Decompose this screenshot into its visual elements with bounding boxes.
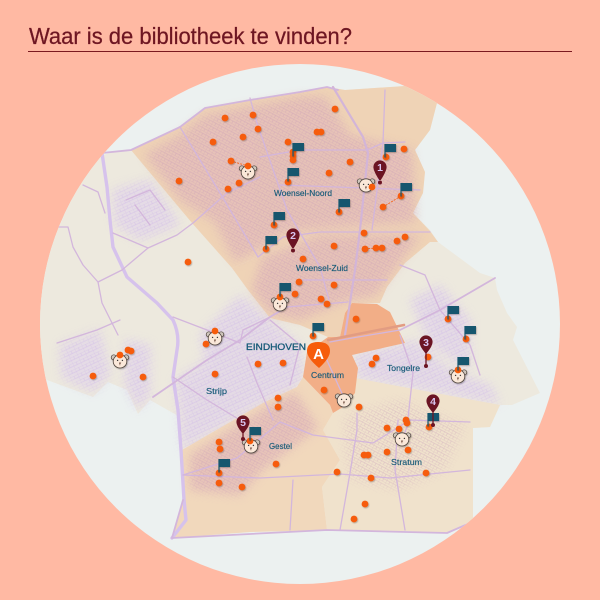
motorways (102, 87, 368, 538)
bear 5 (111, 355, 129, 368)
pin 4: 4 (430, 396, 436, 408)
bear 6 (335, 394, 353, 407)
place labels: Gestel (269, 441, 292, 451)
main roads (57, 87, 495, 538)
bear 4 (206, 332, 224, 345)
flag 6 (273, 212, 285, 226)
district: Centrum (303, 303, 405, 413)
land street texture (59, 180, 497, 446)
flag 8 (279, 283, 291, 296)
district: Stratum (322, 378, 500, 533)
pale urban tint (60, 180, 500, 450)
district: Woensel-Zuid (232, 231, 438, 337)
library dots (90, 106, 469, 522)
flag 13 (427, 413, 439, 426)
place labels: Centrum (311, 370, 344, 380)
marker A (307, 342, 330, 368)
place labels: EINDHOVEN (246, 342, 306, 353)
pin 4 (426, 394, 440, 427)
flag 3 (287, 168, 299, 182)
flag 4 (400, 183, 412, 196)
flag 15 (218, 459, 230, 472)
flag 9 (312, 323, 324, 336)
flag 12 (457, 357, 469, 370)
pin 2: 2 (290, 230, 296, 242)
pin 5: 5 (240, 417, 246, 429)
pin 3 (419, 335, 433, 368)
flag 14 (249, 427, 261, 440)
district: Woensel-Noord (131, 86, 437, 268)
pin 1: 1 (377, 162, 383, 174)
pin 1 (373, 160, 387, 184)
title rule (28, 51, 572, 52)
land area (40, 151, 540, 450)
flag 7 (265, 236, 277, 250)
place labels: Woensel-Noord (274, 188, 332, 198)
flag 5 (338, 199, 350, 212)
dense residential tint (145, 97, 420, 495)
pin 5 (236, 415, 250, 441)
marker A: A (313, 346, 324, 363)
district street texture (148, 96, 464, 495)
flag 2 (384, 144, 396, 158)
flag 11 (464, 326, 476, 340)
bear 9 (242, 440, 260, 453)
pin 2 (286, 228, 300, 252)
flag 1 (292, 143, 304, 156)
bear 2 (357, 179, 375, 192)
dots on top of bears (117, 163, 461, 444)
dashed connector lines (231, 161, 401, 249)
place labels: Woensel-Zuid (296, 263, 348, 273)
district: Gestel (172, 377, 340, 538)
map circle (40, 64, 560, 584)
bear 7 (449, 370, 467, 383)
place labels: Stratum (391, 457, 422, 467)
flags (218, 143, 476, 472)
place labels: Strijp (206, 386, 227, 396)
bear 1 (239, 166, 257, 179)
bear icons (111, 166, 467, 453)
map (40, 86, 540, 540)
place labels: Tongelre (387, 363, 420, 373)
bear 8 (393, 433, 411, 446)
bear 3 (271, 298, 289, 311)
flag 10 (447, 306, 459, 320)
place labels (206, 188, 422, 467)
title: Waar is de bibliotheek te vinden? (29, 23, 352, 49)
pin 3: 3 (423, 337, 429, 349)
